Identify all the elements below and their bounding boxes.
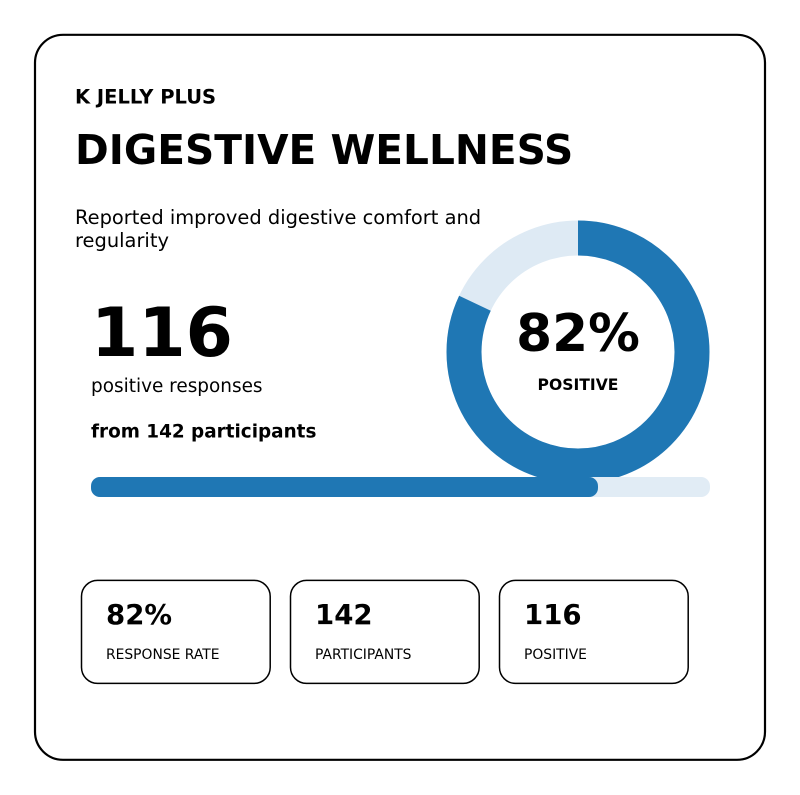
- stat card: response rate: [82, 580, 270, 683]
- title: DIGESTIVE WELLNESS: [75, 126, 573, 174]
- donut value: 82%: [516, 304, 640, 364]
- stat card: participants: [290, 580, 479, 683]
- progress bar: [91, 477, 710, 497]
- stat card: participants: PARTICIPANTS: [315, 647, 412, 663]
- big stat: positive responses: 116: [91, 294, 233, 373]
- participants note: from 142 participants: [91, 422, 316, 442]
- stat card: positive: POSITIVE: [524, 647, 587, 663]
- description: Reported improved digestive comfort and: [75, 206, 481, 229]
- stat card: positive: 116: [524, 598, 582, 631]
- stat card: response rate: 82%: [106, 598, 172, 631]
- stat caption: positive responses: [91, 376, 263, 397]
- stat card: response rate: RESPONSE RATE: [106, 647, 219, 663]
- brand label: K JELLY PLUS: [75, 85, 216, 108]
- donut chart: [464, 238, 692, 466]
- description: regularity: [75, 229, 169, 252]
- description: [75, 206, 481, 252]
- stat card: participants: 142: [315, 598, 373, 631]
- stat card: positive: [500, 580, 688, 683]
- donut label: POSITIVE: [538, 376, 618, 394]
